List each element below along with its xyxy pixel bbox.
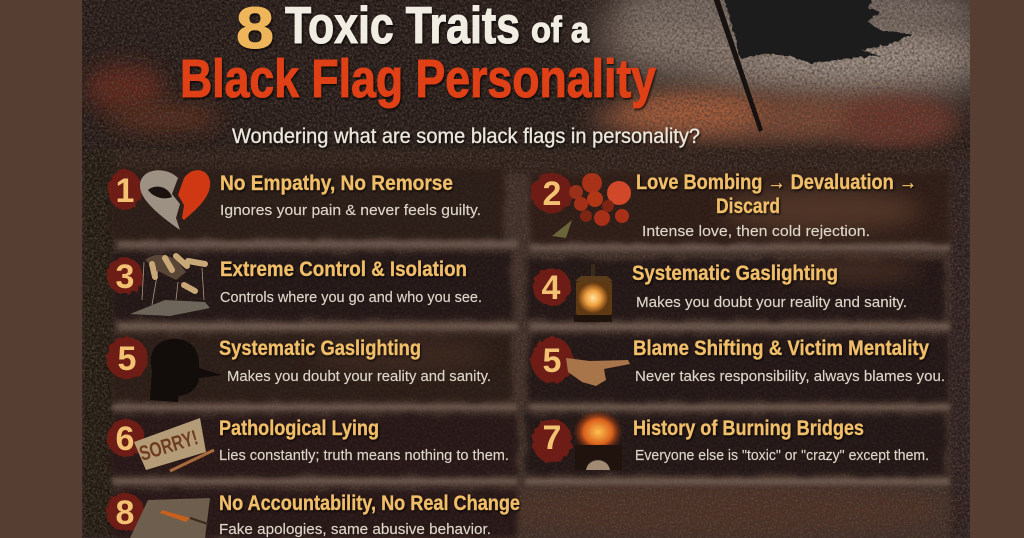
number badge 1 (108, 170, 142, 210)
icon: burning bridge (574, 411, 622, 470)
icon: puppeteer hand and strings (130, 255, 210, 316)
description: Never takes responsibility, always blames you. (635, 369, 945, 385)
icon: long-nosed silhouette (150, 339, 222, 402)
number badge 8 (106, 493, 144, 532)
trait 5 right (531, 337, 945, 386)
title ending: of a (531, 9, 590, 50)
heading: Extreme Control & Isolation (220, 258, 467, 281)
number badge 2 (531, 173, 573, 213)
icon: sorry note: SORRY! (137, 426, 201, 466)
trait 7 (532, 411, 929, 470)
trait 6 (107, 417, 509, 471)
heading: Systematic Gaslighting (632, 262, 838, 285)
description: Makes you doubt your reality and sanity. (636, 295, 907, 311)
title line two: Black Flag Personality (180, 49, 656, 109)
heading: No Accountability, No Real Change (219, 492, 520, 515)
number badge 8: 8 (116, 494, 134, 532)
description: Makes you doubt your reality and sanity. (227, 369, 491, 385)
icon: black flag on pole (713, 0, 912, 132)
description: Ignores your pain & never feels guilty. (220, 203, 481, 219)
number badge 7 (532, 419, 572, 463)
icon: broken heart mask (140, 170, 210, 230)
trait 2 (531, 171, 917, 240)
icon: glowing lantern (574, 264, 613, 322)
heading: Discard (716, 195, 780, 218)
heading: No Empathy, No Remorse (220, 172, 453, 195)
trait 3 (107, 255, 482, 316)
number badge 5: 5 (118, 340, 136, 378)
description: Lies constantly; truth means nothing to them. (219, 448, 509, 464)
icon: pointing finger (566, 358, 630, 386)
description: Everyone else is "toxic" or "crazy" except them. (635, 448, 929, 464)
number badge 2: 2 (543, 175, 561, 213)
icon: rose bouquet (552, 173, 631, 238)
number badge 5 (106, 337, 148, 379)
heading: Systematic Gaslighting (219, 337, 421, 360)
number badge 4: 4 (542, 269, 561, 307)
number badge 5 (531, 337, 573, 383)
panel: row bands and separators (112, 165, 952, 538)
heading (636, 171, 917, 218)
description: Intense love, then cold rejection. (642, 224, 870, 240)
subtitle: Wondering what are some black flags in personality? (232, 125, 700, 148)
number badge 3: 3 (116, 258, 134, 296)
trait 4 (533, 262, 907, 322)
heading: Blame Shifting & Victim Mentality (633, 337, 929, 360)
number badge 3 (107, 258, 143, 296)
description: Fake apologies, same abusive behavior. (219, 522, 491, 538)
heading: History of Burning Bridges (633, 417, 864, 440)
description: Controls where you go and who you see. (220, 290, 482, 306)
number badge 5: 5 (543, 342, 561, 380)
number badge 6 (107, 419, 145, 458)
heading: Pathological Lying (219, 417, 379, 440)
icon: torn paper with pen (130, 498, 210, 538)
trait 5 left (106, 337, 491, 402)
number badge 4 (533, 268, 571, 307)
trait 1 (108, 170, 481, 230)
number badge 6: 6 (116, 420, 134, 458)
heading: Love Bombing → Devaluation → (636, 171, 917, 194)
title (180, 0, 656, 109)
number badge 7: 7 (543, 419, 561, 457)
trait 8 (106, 492, 520, 538)
number badge 1: 1 (116, 172, 134, 210)
